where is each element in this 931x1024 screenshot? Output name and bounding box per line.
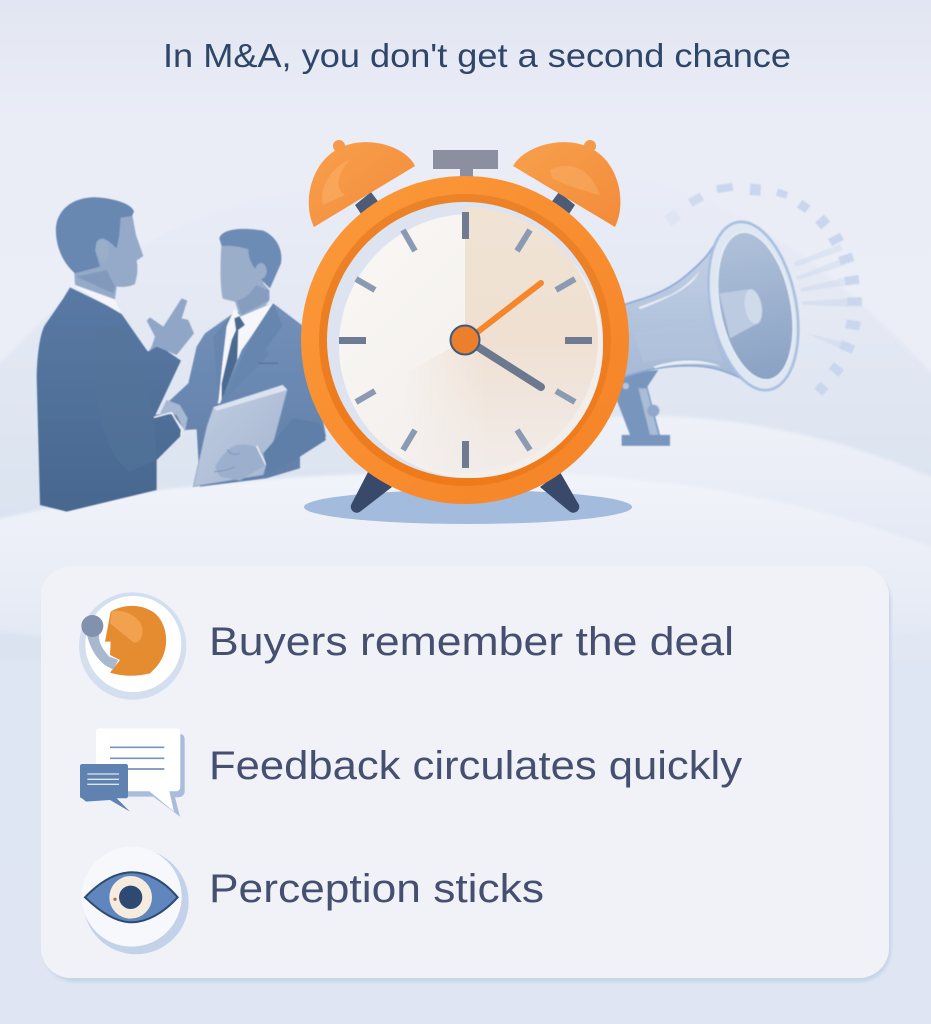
alarm clock [301, 140, 632, 524]
minute hand [475, 283, 541, 334]
label: perception sticks: Perception sticks [209, 867, 544, 911]
icon: eye [82, 847, 189, 954]
list item: buyers remember the deal [79, 592, 734, 700]
clasped hand [160, 400, 188, 432]
hand on folder [215, 444, 266, 481]
clock base shadow [304, 490, 632, 524]
sound wave dashes [664, 183, 862, 396]
list item: feedback circulates quickly [80, 728, 742, 817]
right bell post [550, 192, 575, 217]
hour ticks [339, 212, 592, 468]
clock face [327, 202, 603, 478]
list panel [41, 566, 891, 982]
clock left leg [351, 472, 392, 513]
megaphone bell rim [695, 214, 811, 398]
clock right leg [540, 472, 579, 513]
right bell [513, 142, 620, 227]
illustration: two businessmen talking [37, 197, 326, 512]
label: buyers remember the deal: Buyers remember the deal [209, 620, 734, 664]
megaphone horn [623, 247, 767, 388]
businessman on the right holding a folder [165, 229, 326, 487]
list item: perception sticks [82, 847, 544, 954]
elapsed time wedge [465, 207, 598, 340]
left bell post [355, 192, 380, 217]
title: In M&A, you don't get a second chance [163, 37, 791, 74]
label: feedback circulates quickly: Feedback circulates quickly [209, 744, 742, 788]
megaphone mouth [706, 226, 804, 386]
pointing hand [147, 298, 194, 355]
megaphone driver [719, 289, 762, 338]
illustration: megaphone with sound waves [617, 183, 862, 446]
bell hammer [433, 150, 498, 180]
left bell [309, 142, 415, 227]
clock centre cap [450, 326, 480, 354]
sound wave rays [793, 244, 848, 348]
icon: speech bubbles [80, 728, 185, 817]
fading lower wedge [431, 340, 598, 438]
businessman on the left pointing [37, 197, 194, 512]
icon: head with telephone [79, 592, 186, 700]
hour hand [478, 347, 541, 387]
megaphone stand [617, 370, 670, 446]
clock outer ring [301, 176, 629, 504]
folder [193, 385, 287, 487]
